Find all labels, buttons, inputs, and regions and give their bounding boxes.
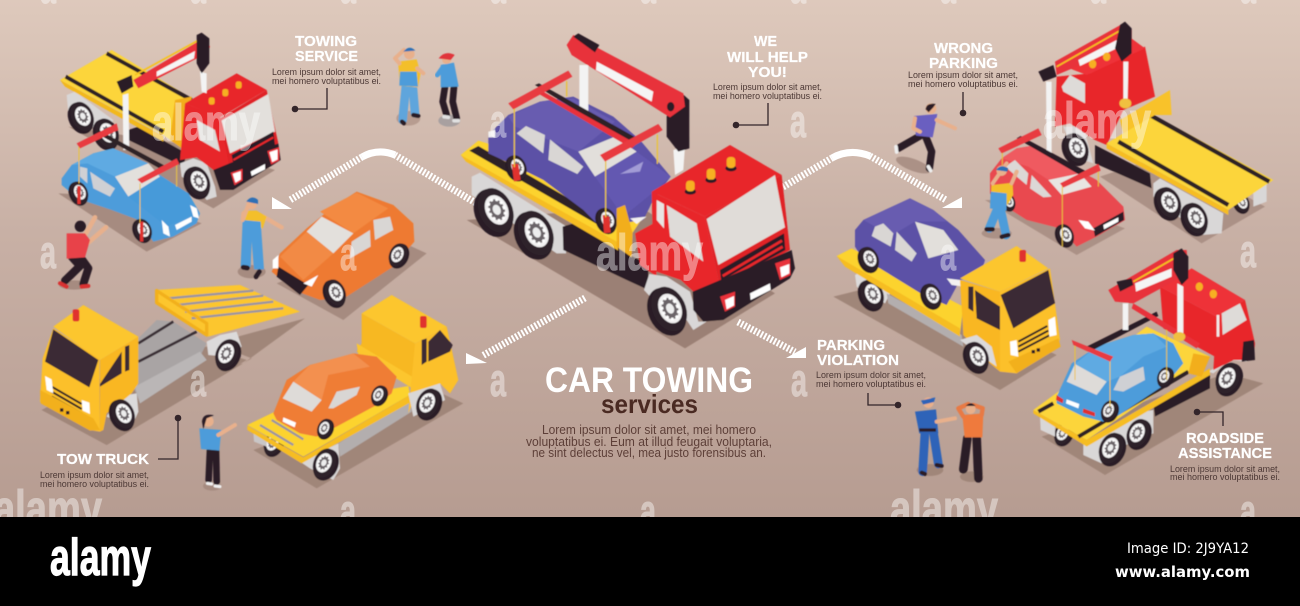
leader: towing service bbox=[292, 88, 327, 112]
text block: we will help you: WE bbox=[754, 34, 777, 50]
person: pushing man in red bbox=[59, 217, 106, 290]
watermarks: a bbox=[1240, 225, 1256, 277]
watermarks: a bbox=[940, 228, 956, 280]
text block: wrong parking: WRONG bbox=[934, 41, 993, 57]
crane arm bbox=[567, 33, 689, 175]
person: woman calling bbox=[199, 415, 235, 491]
footer bar bbox=[0, 517, 1300, 606]
text block: tow truck: Lorem ipsum dolor sit amet, bbox=[40, 470, 149, 480]
yellow flatbed truck with purple car bbox=[833, 198, 1061, 390]
top left crane truck with blue car bbox=[58, 33, 281, 252]
text block: we will help you: mei homero voluptatibus ei. bbox=[713, 91, 822, 101]
text block: towing service: Lorem ipsum dolor sit amet, bbox=[272, 67, 381, 77]
person: woman arguing bbox=[437, 53, 460, 127]
watermarks: alamy bbox=[152, 94, 260, 151]
text block: tow truck: mei homero voluptatibus ei. bbox=[40, 479, 149, 489]
watermarks: a bbox=[340, 485, 356, 537]
text block: roadside assistance: mei homero voluptatibus ei. bbox=[1170, 472, 1280, 482]
text block: we will help you: YOU! bbox=[748, 65, 787, 81]
text block: wrong parking: mei homero voluptatibus ei. bbox=[908, 79, 1018, 89]
text block: parking violation: PARKING bbox=[817, 338, 885, 354]
image id: Image ID: 2J9YA12 bbox=[1127, 541, 1249, 557]
orange car on bed bbox=[273, 353, 397, 442]
text block: we will help you bbox=[713, 34, 822, 101]
person: police officer bbox=[915, 397, 955, 476]
watermarks: alamy bbox=[596, 224, 703, 281]
crane bbox=[1108, 248, 1188, 341]
text block: tow truck: TOW TRUCK bbox=[57, 452, 150, 468]
grey front fender bbox=[644, 274, 707, 330]
blue car on bed bbox=[1056, 333, 1183, 426]
text block: parking violation: mei homero voluptatibus ei. bbox=[816, 379, 926, 389]
arrow: to tow truck bbox=[466, 298, 585, 364]
text block: roadside assistance: Lorem ipsum dolor sit amet, bbox=[1170, 464, 1280, 474]
arrow: to parking violation truck bbox=[783, 152, 962, 208]
leader: roadside assistance bbox=[1194, 409, 1223, 426]
watermarks: a bbox=[490, 95, 506, 147]
website: www.alamy.com bbox=[1115, 563, 1250, 581]
orange car bbox=[272, 192, 427, 320]
title bbox=[545, 361, 753, 419]
yellow tow truck with ramp bbox=[40, 285, 305, 445]
arrow: to parking violation bbox=[738, 322, 806, 358]
watermarks: a bbox=[490, 354, 506, 406]
watermarks: alamy bbox=[1043, 92, 1151, 149]
cab bbox=[1160, 268, 1255, 370]
title description: voluptatibus ei. Eum at illud feugait voluptaria, bbox=[526, 435, 772, 449]
bottom right crane truck with blue car bbox=[1033, 248, 1263, 475]
watermarks: a bbox=[791, 354, 807, 406]
watermarks: a bbox=[640, 485, 656, 537]
watermarks: a bbox=[190, 354, 206, 406]
text block: wrong parking: PARKING bbox=[929, 56, 998, 72]
footer logo: alamy bbox=[50, 529, 151, 587]
leader: tow truck bbox=[158, 415, 181, 459]
leader: wrong parking bbox=[960, 92, 966, 116]
text block: towing service: SERVICE bbox=[295, 49, 358, 65]
watermarks: a bbox=[1240, 485, 1256, 537]
text block: parking violation bbox=[816, 338, 926, 389]
text block: wrong parking: Lorem ipsum dolor sit amet, bbox=[908, 70, 1018, 80]
text block: we will help you: WILL HELP bbox=[727, 50, 808, 66]
leader: we will help you bbox=[733, 103, 768, 128]
watermarks: a bbox=[340, 228, 356, 280]
text block: parking violation: Lorem ipsum dolor sit amet, bbox=[816, 370, 926, 380]
title description bbox=[526, 423, 772, 460]
text block: roadside assistance: ASSISTANCE bbox=[1178, 446, 1272, 462]
roof lights bbox=[685, 157, 737, 195]
yellow flatbed truck with orange car bbox=[247, 295, 463, 488]
text block: wrong parking bbox=[908, 41, 1018, 89]
text block: towing service: TOWING bbox=[295, 34, 357, 50]
title: services bbox=[601, 389, 698, 419]
watermarks: alamy bbox=[890, 480, 998, 537]
crane bbox=[1038, 22, 1132, 155]
title: CAR TOWING bbox=[545, 361, 753, 400]
person: man in orange holding head bbox=[958, 403, 983, 482]
watermarks: a bbox=[790, 95, 806, 147]
purple car on flatbed bbox=[488, 97, 671, 238]
ramp bbox=[155, 285, 300, 337]
title description: Lorem ipsum dolor sit amet, mei homero bbox=[542, 423, 756, 437]
text block: roadside assistance: ROADSIDE bbox=[1186, 431, 1264, 447]
leader: parking violation bbox=[868, 393, 901, 408]
text block: roadside assistance bbox=[1170, 431, 1280, 482]
person: worker arguing bbox=[395, 48, 423, 126]
text block: towing service: mei homero voluptatibus ei. bbox=[272, 76, 381, 86]
title description: ne sint delectus vel, mea justo forensibus an. bbox=[532, 446, 766, 460]
arrow: to towing service bbox=[272, 152, 476, 209]
red car bbox=[985, 128, 1125, 255]
watermarks: a bbox=[40, 226, 56, 278]
person: worker pointing bbox=[238, 198, 282, 278]
purple car on truck bbox=[853, 198, 985, 313]
text block: towing service bbox=[272, 34, 381, 86]
top right crane flatbed truck with red car bbox=[985, 22, 1273, 255]
person: running man bbox=[894, 103, 955, 177]
central crane tow truck with purple car bbox=[461, 33, 795, 348]
text block: tow truck bbox=[40, 452, 150, 489]
person: worker at red car bbox=[982, 163, 1017, 239]
blue car bbox=[58, 147, 202, 252]
text block: parking violation: VIOLATION bbox=[817, 353, 899, 369]
text block: we will help you: Lorem ipsum dolor sit amet, bbox=[713, 82, 822, 92]
